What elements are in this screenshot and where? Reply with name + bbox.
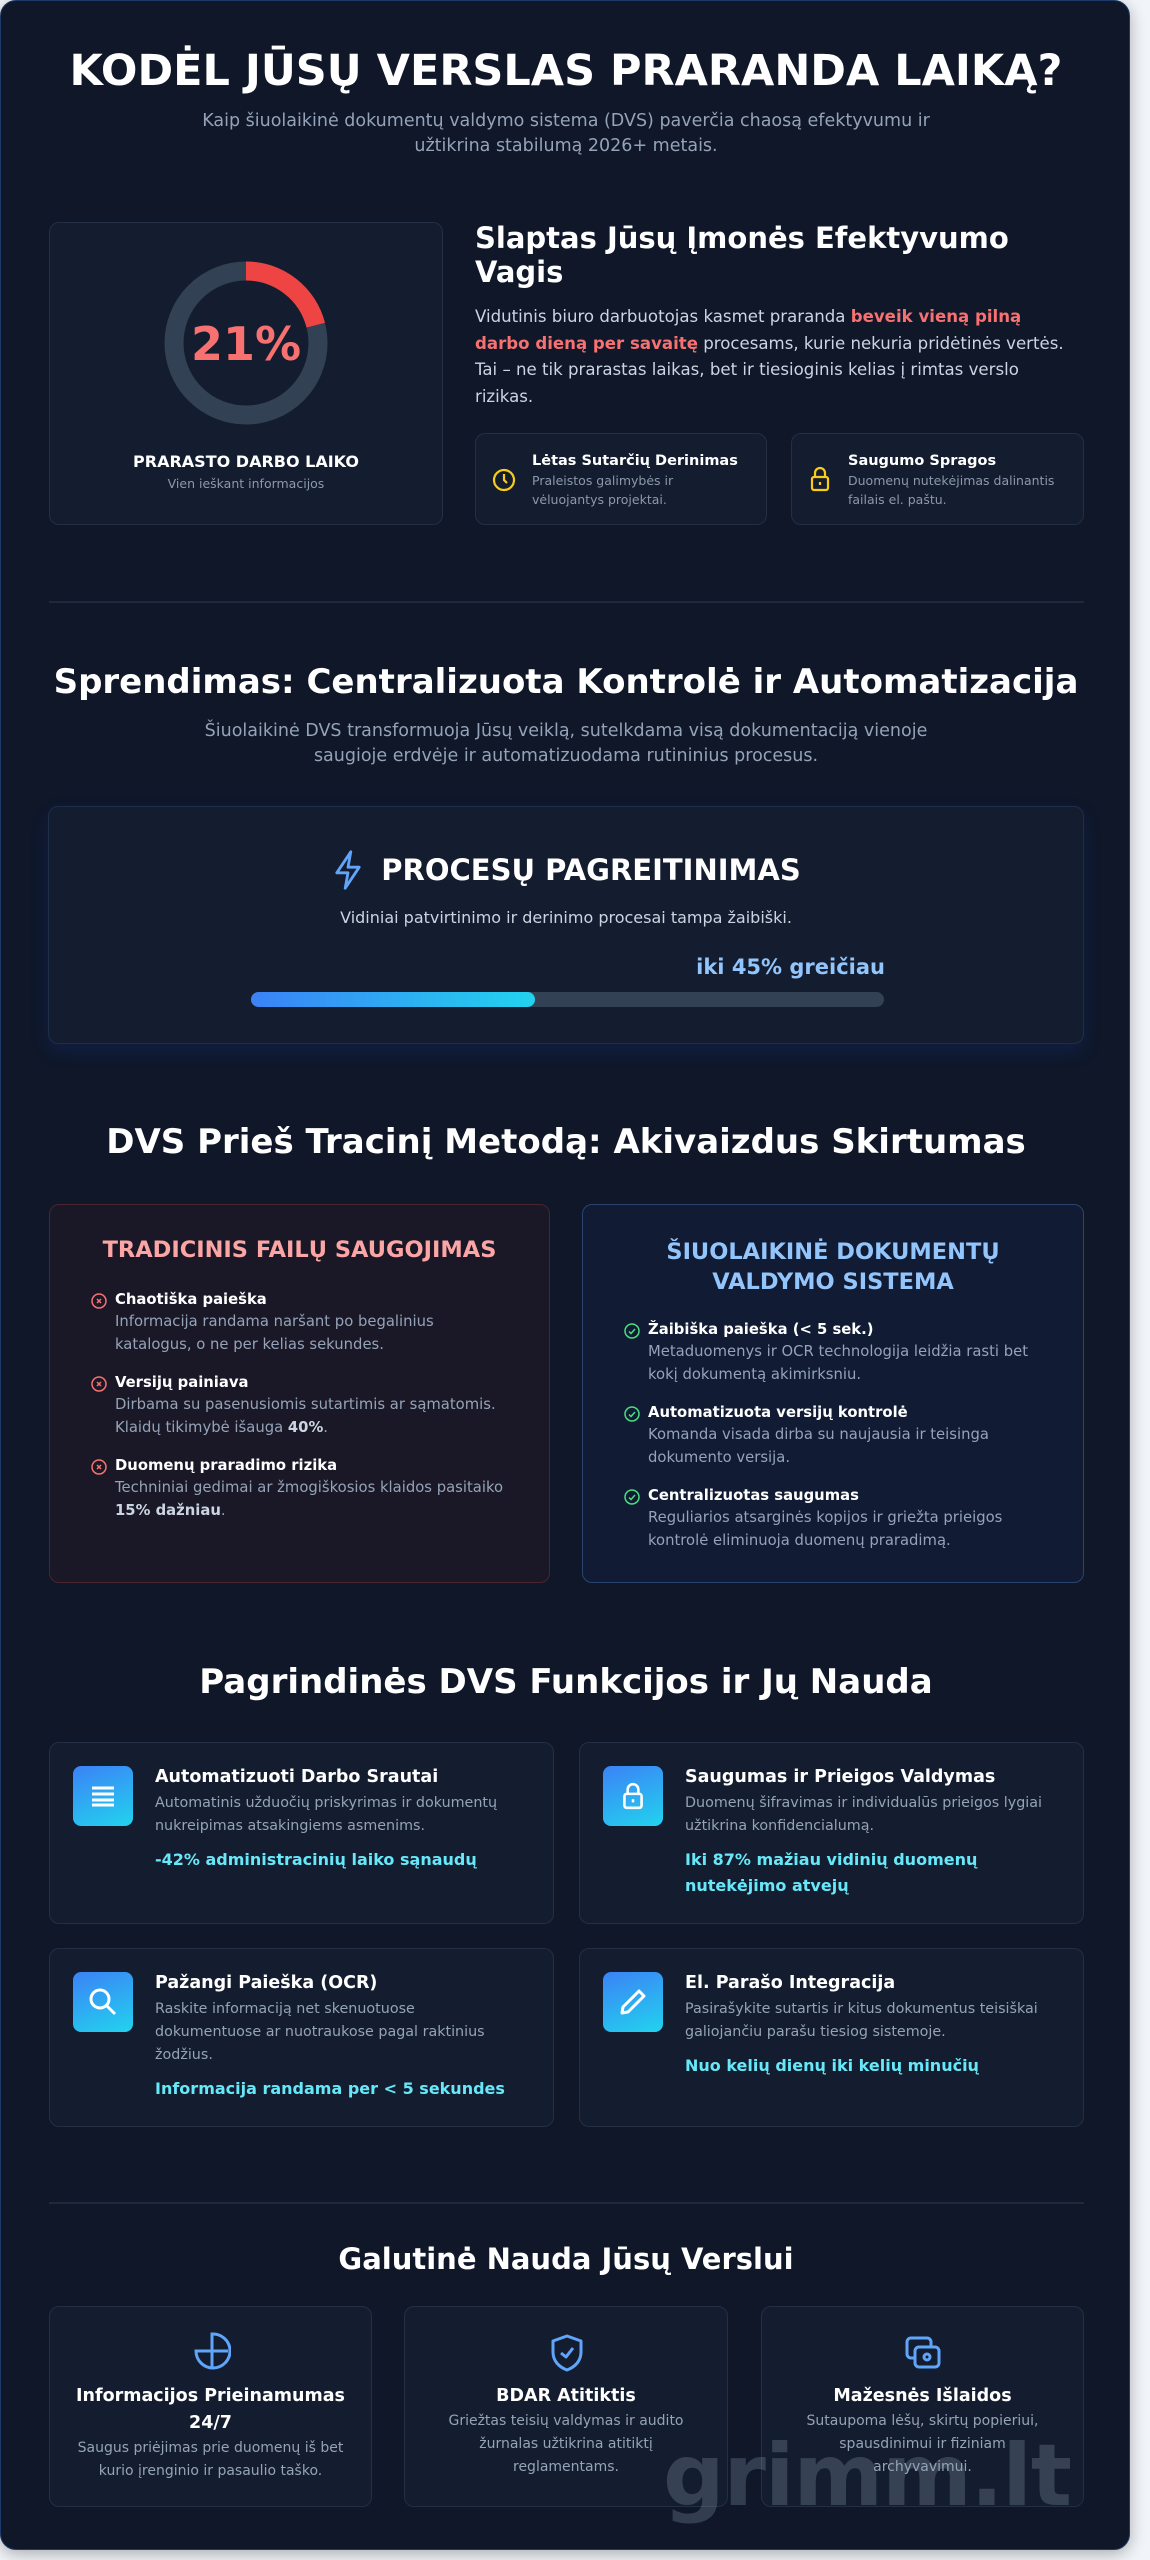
- icon: check: [624, 1323, 640, 1339]
- item: chaotic search: Chaotiška paieška: [115, 1291, 267, 1308]
- item: chaotic search: Informacija randama naršant po begalinius katalogus, o ne per kelias sekundes.: [115, 1313, 434, 1352]
- panel: donut stat: [49, 222, 443, 525]
- card: security gaps: Saugumo Spragos: [848, 453, 996, 469]
- item: fast search: Žaibiška paieška (< 5 sek.): [648, 1321, 874, 1338]
- item: version control: [624, 1404, 989, 1466]
- card: security: Duomenų šifravimas ir individualūs prieigos lygiai užtikrina konfidencialumą.: [685, 1795, 1042, 1834]
- panel: modern DVS: [582, 1204, 1084, 1583]
- card: availability: Saugus priėjimas prie duomenų iš bet kurio įrenginio ir pasaulio taško.: [78, 2440, 343, 2479]
- icon: lock: [603, 1766, 663, 1826]
- stat label: PRARASTO DARBO LAIKO: [133, 452, 359, 471]
- icon: list: [73, 1766, 133, 1826]
- icon: shield: [552, 2334, 582, 2372]
- card: OCR search: [49, 1948, 554, 2127]
- card: slow contracts: Praleistos galimybės ir vėluojantys projektai.: [532, 473, 673, 507]
- item: versions: [91, 1374, 496, 1436]
- card: e-signature: Nuo kelių dienų iki kelių minučių: [685, 2056, 979, 2075]
- heading: solution: Sprendimas: Centralizuota Kontrolė ir Automatizacija: [54, 662, 1078, 702]
- watermark: grimm.lt: [663, 2426, 1071, 2526]
- item: security: Reguliarios atsarginės kopijos ir griežta prieigos kontrolė eliminuoja duomenų praradimą.: [648, 1509, 1002, 1548]
- item: versions: Versijų painiava: [115, 1374, 248, 1391]
- heading: TRADICINIS FAILŲ SAUGOJIMAS: [103, 1237, 496, 1263]
- heading with icon: PROCESŲ PAGREITINIMAS: [381, 853, 801, 887]
- card: GDPR: [404, 2306, 728, 2507]
- card: workflows: [49, 1742, 554, 1924]
- heading: final benefits: Galutinė Nauda Jūsų Verslui: [338, 2242, 794, 2276]
- heading: VALDYMO SISTEMA: [712, 1269, 954, 1295]
- card: e-signature: [579, 1948, 1084, 2127]
- icon: pencil: [603, 1972, 663, 2032]
- card: OCR search: Raskite informaciją net skenuotuose dokumentuose ar nuotraukose pagal raktinius žodžius.: [155, 2001, 485, 2063]
- icon: check: [624, 1489, 640, 1505]
- card: security gaps: [791, 433, 1084, 525]
- donut chart: [164, 262, 328, 424]
- heading: hidden thief: Slaptas Jūsų Įmonės Efektyvumo Vagis: [475, 221, 1009, 289]
- card: OCR search: Informacija randama per < 5 sekundes: [155, 2079, 505, 2098]
- heading: features: Pagrindinės DVS Funkcijos ir Jų Nauda: [199, 1662, 933, 1702]
- card: OCR search: Pažangi Paieška (OCR): [155, 1973, 377, 1993]
- card: security gaps: Duomenų nutekėjimas dalinantis failais el. paštu.: [848, 473, 1054, 507]
- icon: magnifier: [73, 1972, 133, 2032]
- item: chaotic search: [91, 1291, 434, 1352]
- item: version control: Komanda visada dirba su naujausia ir teisinga dokumento versija.: [648, 1426, 989, 1466]
- item: fast search: [624, 1320, 1028, 1382]
- item: data loss: [91, 1457, 503, 1518]
- icon: x: [91, 1376, 107, 1392]
- panel: process acceleration: [48, 806, 1084, 1044]
- text block: intro paragraph: Vidutinis biuro darbuotojas kasmet praranda beveik vieną pilną darbo dieną per savaitę procesams, kurie nekuria pridėtinės vertės. Tai – ne tik prarastas laikas, bet ir tiesioginis kelias į rimtas verslo rizikas.: [475, 307, 1064, 406]
- icon: money: [906, 2336, 940, 2368]
- text: Vidiniai patvirtinimo ir derinimo procesai tampa žaibiški.: [340, 908, 792, 927]
- subtitle: solution: Šiuolaikinė DVS transformuoja Jūsų veiklą, sutelkdama visą dokumentaciją vienoje saugioje erdvėje ir automatizuodama rutininius procesus.: [205, 721, 927, 766]
- icon: check: [624, 1406, 640, 1422]
- donut chart: 21%: [191, 317, 301, 371]
- card: workflows: -42% administracinių laiko sąnaudų: [155, 1850, 477, 1869]
- card: security: [579, 1742, 1084, 1924]
- card: lower costs: Sutaupoma lėšų, skirtų popieriui, spausdinimui ir fiziniam archyvavimui.: [807, 2413, 1038, 2475]
- card: GDPR: Griežtas teisių valdymas ir audito žurnalas užtikrina atitiktį reglamentams.: [448, 2413, 684, 2475]
- item: security: [624, 1487, 1002, 1548]
- card: security: Iki 87% mažiau vidinių duomenų nutekėjimo atvejų: [685, 1850, 977, 1895]
- icon: globe: [194, 2332, 231, 2370]
- heading: [666, 1238, 1000, 1295]
- card: security: Saugumas ir Prieigos Valdymas: [685, 1767, 995, 1787]
- stat label: [133, 452, 359, 491]
- item: fast search: Metaduomenys ir OCR technologija leidžia rasti bet kokį dokumentą akimirksniu.: [648, 1343, 1028, 1382]
- icon: lightning: [335, 850, 361, 890]
- card: lower costs: Mažesnės Išlaidos: [833, 2386, 1012, 2406]
- card: workflows: Automatinis užduočių priskyrimas ir dokumentų nukreipimas atsakingiems asmenims.: [155, 1795, 497, 1834]
- panel: traditional: [49, 1204, 550, 1583]
- item: version control: Automatizuota versijų kontrolė: [648, 1404, 908, 1421]
- item: versions: Dirbama su pasenusiomis sutartimis ar sąmatomis. Klaidų tikimybė išauga 40%.: [115, 1396, 496, 1436]
- card: workflows: Automatizuoti Darbo Srautai: [155, 1767, 438, 1787]
- card: availability: [49, 2306, 372, 2507]
- title: KODĖL JŪSŲ VERSLAS PRARANDA LAIKĄ?: [70, 46, 1062, 96]
- card: e-signature: Pasirašykite sutartis ir kitus dokumentus teisiškai galiojančiu parašu tiesiog sistemoje.: [685, 2001, 1038, 2040]
- icon: lock: [810, 466, 830, 492]
- card: availability: Informacijos Prieinamumas 24/7: [76, 2386, 345, 2433]
- icon: x: [91, 1459, 107, 1475]
- heading: comparison: DVS Prieš Tracinį Metodą: Akivaizdus Skirtumas: [106, 1122, 1026, 1162]
- progress bar: [251, 992, 884, 1007]
- card: lower costs: [761, 2306, 1084, 2507]
- icon: x: [91, 1293, 107, 1309]
- subtitle: Kaip šiuolaikinė dokumentų valdymo sistema (DVS) paverčia chaosą efektyvumu ir užtikrina stabilumą 2026+ metais.: [202, 111, 930, 156]
- card: e-signature: El. Parašo Integracija: [685, 1973, 895, 1993]
- item: security: Centralizuotas saugumas: [648, 1487, 859, 1504]
- item: data loss: Techniniai gedimai ar žmogiškosios klaidos pasitaiko 15% dažniau.: [115, 1479, 503, 1518]
- card: slow contracts: Lėtas Sutarčių Derinimas: [532, 453, 738, 469]
- card: slow contracts: [475, 433, 767, 525]
- icon: clock: [492, 468, 516, 492]
- item: data loss: Duomenų praradimo rizika: [115, 1457, 337, 1474]
- stat label: Vien ieškant informacijos: [168, 476, 324, 491]
- stat label: iki 45% greičiau: [696, 955, 885, 979]
- card: GDPR: BDAR Atitiktis: [496, 2386, 636, 2406]
- heading: ŠIUOLAIKINĖ DOKUMENTŲ: [666, 1239, 1000, 1265]
